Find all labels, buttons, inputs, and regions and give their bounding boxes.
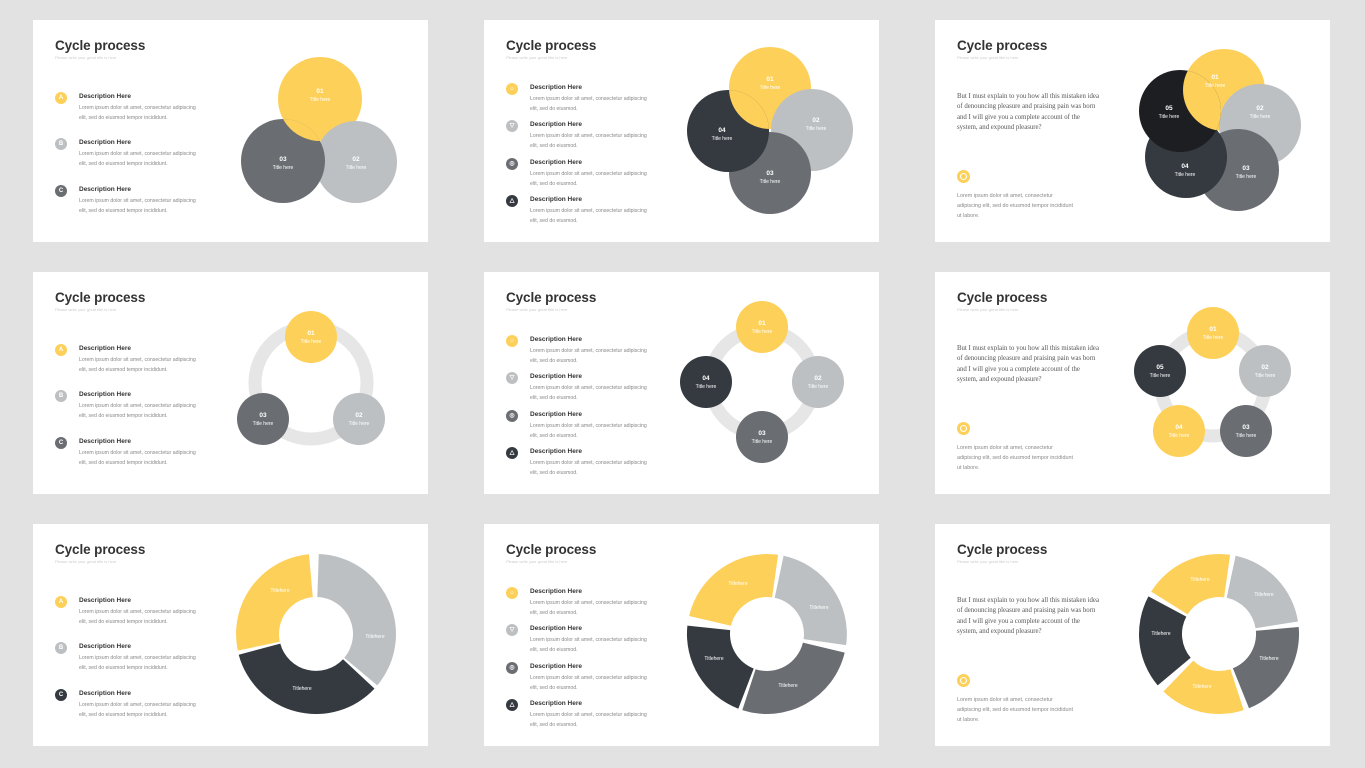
item 4 bbox=[506, 195, 647, 224]
item B: elit, sed do eiusmod tempor incididunt. bbox=[79, 665, 168, 671]
item 2: Description Here bbox=[530, 121, 582, 128]
item B: Lorem ipsum dolor sit amet, consectetur adipiscing bbox=[79, 151, 196, 157]
subtitle: Please write your great title is here bbox=[957, 559, 1018, 564]
item C: C bbox=[59, 440, 63, 446]
subtitle: Please write your great title is here bbox=[55, 307, 116, 312]
circle diagram: 04 bbox=[718, 127, 726, 134]
circle diagram: Title here bbox=[760, 85, 781, 91]
item 2: Lorem ipsum dolor sit amet, consectetur adipiscing bbox=[530, 133, 647, 139]
panel: three overlapping circles bbox=[33, 20, 428, 242]
item B: B bbox=[59, 393, 63, 399]
small text: ut labore. bbox=[957, 717, 979, 723]
circle diagram bbox=[687, 47, 853, 214]
item 2: Description Here bbox=[530, 625, 582, 632]
ring diagram: Title here bbox=[1255, 373, 1276, 379]
item C: elit, sed do eiusmod tempor incididunt. bbox=[79, 208, 168, 214]
paragraph bbox=[957, 345, 1099, 383]
item 1 bbox=[506, 587, 647, 616]
small text: adipiscing elit, sed do eiusmod tempor incididunt bbox=[957, 455, 1073, 461]
small text bbox=[957, 445, 1073, 471]
circle diagram: Title here bbox=[806, 126, 827, 132]
circle diagram: Title here bbox=[1205, 83, 1226, 89]
ring diagram bbox=[680, 301, 844, 463]
ring diagram bbox=[1134, 307, 1291, 457]
item A: elit, sed do eiusmod tempor incididunt. bbox=[79, 619, 168, 625]
item 2: Description Here bbox=[530, 373, 582, 380]
item 3: Description Here bbox=[530, 411, 582, 418]
ring diagram: 02 bbox=[1261, 364, 1269, 371]
item 4: Lorem ipsum dolor sit amet, consectetur adipiscing bbox=[530, 460, 647, 466]
item 2 bbox=[506, 624, 647, 653]
circle diagram: Title here bbox=[1159, 114, 1180, 120]
item B: B bbox=[59, 645, 63, 651]
ring diagram: Title here bbox=[1203, 335, 1224, 341]
ring diagram: Title here bbox=[808, 384, 829, 390]
item 4: △ bbox=[510, 198, 514, 204]
circle diagram: Title here bbox=[1236, 174, 1257, 180]
item 4: elit, sed do eiusmod. bbox=[530, 218, 578, 224]
ring diagram: 01 bbox=[758, 320, 766, 327]
donut diagram: Titlehere bbox=[1192, 684, 1212, 690]
ring diagram: 05 bbox=[1156, 364, 1164, 371]
ring diagram: 01 bbox=[307, 330, 315, 337]
item B bbox=[55, 642, 196, 671]
subtitle: Please write your great title is here bbox=[55, 559, 116, 564]
item 1: Lorem ipsum dolor sit amet, consectetur adipiscing bbox=[530, 96, 647, 102]
item 1 bbox=[506, 335, 647, 364]
ring diagram: 02 bbox=[814, 375, 822, 382]
item 2 bbox=[506, 120, 647, 149]
item 1: elit, sed do eiusmod. bbox=[530, 610, 578, 616]
circle diagram bbox=[1139, 49, 1301, 211]
small text: Lorem ipsum dolor sit amet, consectetur bbox=[957, 193, 1053, 199]
paragraph: and I will give you a complete account of the bbox=[957, 366, 1080, 373]
title: Cycle process bbox=[506, 290, 596, 305]
paragraph: But I must explain to you how all this mistaken idea bbox=[957, 597, 1099, 604]
item 1: ☼ bbox=[509, 338, 515, 344]
ring diagram: Title here bbox=[752, 439, 773, 445]
item B: Lorem ipsum dolor sit amet, consectetur adipiscing bbox=[79, 655, 196, 661]
small text: adipiscing elit, sed do eiusmod tempor incididunt bbox=[957, 707, 1073, 713]
item C: Lorem ipsum dolor sit amet, consectetur adipiscing bbox=[79, 198, 196, 204]
item 1: ☼ bbox=[509, 86, 515, 92]
paragraph: But I must explain to you how all this mistaken idea bbox=[957, 345, 1099, 352]
subtitle: Please write your great title is here bbox=[506, 307, 567, 312]
circle diagram: Title here bbox=[346, 165, 367, 171]
circle diagram: 02 bbox=[352, 156, 360, 163]
title: Cycle process bbox=[506, 542, 596, 557]
item C: Description Here bbox=[79, 186, 131, 193]
title: Cycle process bbox=[55, 542, 145, 557]
circle diagram: 02 bbox=[1256, 105, 1264, 112]
item 2: Lorem ipsum dolor sit amet, consectetur adipiscing bbox=[530, 385, 647, 391]
item A: Lorem ipsum dolor sit amet, consectetur adipiscing bbox=[79, 609, 196, 615]
ring diagram: 03 bbox=[758, 430, 766, 437]
item C: elit, sed do eiusmod tempor incididunt. bbox=[79, 460, 168, 466]
item C: C bbox=[59, 188, 63, 194]
item 3: elit, sed do eiusmod. bbox=[530, 685, 578, 691]
circle diagram: 02 bbox=[812, 117, 820, 124]
item 4: Description Here bbox=[530, 700, 582, 707]
paragraph: and I will give you a complete account of the bbox=[957, 618, 1080, 625]
item B: Description Here bbox=[79, 643, 131, 650]
item C bbox=[55, 185, 196, 214]
item B: Lorem ipsum dolor sit amet, consectetur adipiscing bbox=[79, 403, 196, 409]
subtitle: Please write your great title is here bbox=[506, 55, 567, 60]
ring diagram: 03 bbox=[259, 412, 267, 419]
item 4: Lorem ipsum dolor sit amet, consectetur adipiscing bbox=[530, 712, 647, 718]
item A: Description Here bbox=[79, 345, 131, 352]
circle diagram: Title here bbox=[712, 136, 733, 142]
paragraph: system, and expound pleasure? bbox=[957, 628, 1042, 635]
item 3 bbox=[506, 662, 647, 691]
ring diagram: 04 bbox=[702, 375, 710, 382]
circle diagram bbox=[241, 57, 397, 203]
item B: elit, sed do eiusmod tempor incididunt. bbox=[79, 161, 168, 167]
circle diagram: Title here bbox=[273, 165, 294, 171]
donut diagram: Titlehere bbox=[704, 656, 724, 662]
item 2 bbox=[506, 372, 647, 401]
item 2: ▽ bbox=[510, 627, 514, 633]
circle diagram: 01 bbox=[1211, 74, 1219, 81]
circle diagram: 05 bbox=[1165, 105, 1173, 112]
item 3: Description Here bbox=[530, 663, 582, 670]
ring diagram: 01 bbox=[1209, 326, 1217, 333]
item 2: elit, sed do eiusmod. bbox=[530, 395, 578, 401]
item C bbox=[55, 437, 196, 466]
ring diagram: 02 bbox=[355, 412, 363, 419]
panel: four overlapping circles bbox=[484, 20, 879, 242]
item 1: Description Here bbox=[530, 588, 582, 595]
item A bbox=[55, 596, 196, 625]
item C: Description Here bbox=[79, 690, 131, 697]
circle diagram: 03 bbox=[766, 170, 774, 177]
small text: Lorem ipsum dolor sit amet, consectetur bbox=[957, 697, 1053, 703]
circle diagram: 04 bbox=[1181, 163, 1189, 170]
paragraph: But I must explain to you how all this mistaken idea bbox=[957, 93, 1099, 100]
ring diagram: Title here bbox=[301, 339, 322, 345]
ring diagram: 04 bbox=[1175, 424, 1183, 431]
item A: Description Here bbox=[79, 597, 131, 604]
paragraph: of denouncing pleasure and praising pain was born bbox=[957, 103, 1095, 110]
donut diagram: Titlehere bbox=[1259, 656, 1279, 662]
panel: three-segment donut bbox=[33, 524, 428, 746]
item B: B bbox=[59, 141, 63, 147]
title: Cycle process bbox=[55, 290, 145, 305]
item A: A bbox=[59, 599, 63, 605]
item 4: elit, sed do eiusmod. bbox=[530, 470, 578, 476]
item 2: ▽ bbox=[510, 375, 514, 381]
item 3 bbox=[506, 158, 647, 187]
circle diagram: Title here bbox=[760, 179, 781, 185]
circle diagram: 01 bbox=[316, 88, 324, 95]
paragraph bbox=[957, 93, 1099, 131]
item A: A bbox=[59, 347, 63, 353]
item 3: ◎ bbox=[509, 161, 515, 167]
item C: C bbox=[59, 692, 63, 698]
panel: five-segment donut bbox=[935, 524, 1330, 746]
item 3 bbox=[506, 410, 647, 439]
panel: ring with five circles bbox=[935, 272, 1330, 494]
small text: ut labore. bbox=[957, 465, 979, 471]
item 3: Lorem ipsum dolor sit amet, consectetur adipiscing bbox=[530, 171, 647, 177]
item B bbox=[55, 138, 196, 167]
donut diagram: Titlehere bbox=[1190, 577, 1210, 583]
item A: elit, sed do eiusmod tempor incididunt. bbox=[79, 115, 168, 121]
circle diagram: 01 bbox=[766, 76, 774, 83]
title: Cycle process bbox=[957, 290, 1047, 305]
circle diagram: Title here bbox=[310, 97, 331, 103]
ring diagram: Title here bbox=[349, 421, 370, 427]
item 2: ▽ bbox=[510, 123, 514, 129]
item B bbox=[55, 390, 196, 419]
paragraph: of denouncing pleasure and praising pain was born bbox=[957, 607, 1095, 614]
donut diagram: Titlehere bbox=[365, 634, 385, 640]
donut diagram: Titlehere bbox=[292, 686, 312, 692]
item 4: △ bbox=[510, 450, 514, 456]
paragraph bbox=[957, 597, 1099, 635]
ring diagram: Title here bbox=[1236, 433, 1257, 439]
item A: Lorem ipsum dolor sit amet, consectetur adipiscing bbox=[79, 357, 196, 363]
donut diagram bbox=[686, 554, 847, 714]
item C: Lorem ipsum dolor sit amet, consectetur adipiscing bbox=[79, 450, 196, 456]
title: Cycle process bbox=[55, 38, 145, 53]
small text: Lorem ipsum dolor sit amet, consectetur bbox=[957, 445, 1053, 451]
item 2: Lorem ipsum dolor sit amet, consectetur adipiscing bbox=[530, 637, 647, 643]
panel: five overlapping circles bbox=[935, 20, 1330, 242]
item 4: elit, sed do eiusmod. bbox=[530, 722, 578, 728]
donut diagram: Titlehere bbox=[1254, 592, 1274, 598]
circle diagram: 03 bbox=[1242, 165, 1250, 172]
item B: elit, sed do eiusmod tempor incididunt. bbox=[79, 413, 168, 419]
item A: A bbox=[59, 95, 63, 101]
item 1: Lorem ipsum dolor sit amet, consectetur adipiscing bbox=[530, 600, 647, 606]
item 3: Description Here bbox=[530, 159, 582, 166]
item A bbox=[55, 344, 196, 373]
icon bbox=[957, 674, 970, 687]
ring diagram: Title here bbox=[253, 421, 274, 427]
item C: elit, sed do eiusmod tempor incididunt. bbox=[79, 712, 168, 718]
ring diagram: Title here bbox=[1150, 373, 1171, 379]
small text bbox=[957, 697, 1073, 723]
donut diagram bbox=[1139, 554, 1299, 714]
ring diagram: Title here bbox=[696, 384, 717, 390]
ring diagram: Title here bbox=[752, 329, 773, 335]
item 2: elit, sed do eiusmod. bbox=[530, 647, 578, 653]
item 3: Lorem ipsum dolor sit amet, consectetur adipiscing bbox=[530, 675, 647, 681]
small text: adipiscing elit, sed do eiusmod tempor incididunt bbox=[957, 203, 1073, 209]
item 4 bbox=[506, 699, 647, 728]
ring diagram: Title here bbox=[1169, 433, 1190, 439]
item 4 bbox=[506, 447, 647, 476]
item 4: △ bbox=[510, 702, 514, 708]
ring diagram bbox=[237, 311, 385, 446]
item 1: Lorem ipsum dolor sit amet, consectetur adipiscing bbox=[530, 348, 647, 354]
donut diagram: Titlehere bbox=[778, 683, 798, 689]
item 1 bbox=[506, 83, 647, 112]
subtitle: Please write your great title is here bbox=[55, 55, 116, 60]
donut diagram: Titlehere bbox=[809, 605, 829, 611]
title: Cycle process bbox=[506, 38, 596, 53]
donut diagram: Titlehere bbox=[270, 588, 290, 594]
item 1: ☼ bbox=[509, 590, 515, 596]
item 3: elit, sed do eiusmod. bbox=[530, 433, 578, 439]
subtitle: Please write your great title is here bbox=[957, 307, 1018, 312]
donut diagram: Titlehere bbox=[1151, 631, 1171, 637]
item 2: elit, sed do eiusmod. bbox=[530, 143, 578, 149]
item B: Description Here bbox=[79, 139, 131, 146]
item A bbox=[55, 92, 196, 121]
paragraph: of denouncing pleasure and praising pain was born bbox=[957, 355, 1095, 362]
small text bbox=[957, 193, 1073, 219]
item C bbox=[55, 689, 196, 718]
circle diagram: 03 bbox=[279, 156, 287, 163]
item A: elit, sed do eiusmod tempor incididunt. bbox=[79, 367, 168, 373]
ring diagram: 03 bbox=[1242, 424, 1250, 431]
donut diagram: Titlehere bbox=[728, 581, 748, 587]
paragraph: system, and expound pleasure? bbox=[957, 124, 1042, 131]
item 4: Description Here bbox=[530, 448, 582, 455]
item A: Lorem ipsum dolor sit amet, consectetur adipiscing bbox=[79, 105, 196, 111]
panel: ring with three circles bbox=[33, 272, 428, 494]
icon bbox=[957, 422, 970, 435]
paragraph: system, and expound pleasure? bbox=[957, 376, 1042, 383]
icon bbox=[957, 170, 970, 183]
circle diagram: Title here bbox=[1250, 114, 1271, 120]
item 4: Lorem ipsum dolor sit amet, consectetur adipiscing bbox=[530, 208, 647, 214]
item C: Lorem ipsum dolor sit amet, consectetur adipiscing bbox=[79, 702, 196, 708]
donut diagram bbox=[236, 554, 396, 714]
circle diagram: Title here bbox=[1175, 172, 1196, 178]
item 1: elit, sed do eiusmod. bbox=[530, 106, 578, 112]
small text: ut labore. bbox=[957, 213, 979, 219]
panel: four-segment donut bbox=[484, 524, 879, 746]
title: Cycle process bbox=[957, 542, 1047, 557]
item A: Description Here bbox=[79, 93, 131, 100]
item 3: elit, sed do eiusmod. bbox=[530, 181, 578, 187]
panel: ring with four circles bbox=[484, 272, 879, 494]
item C: Description Here bbox=[79, 438, 131, 445]
paragraph: and I will give you a complete account of the bbox=[957, 114, 1080, 121]
item 3: ◎ bbox=[509, 665, 515, 671]
item 4: Description Here bbox=[530, 196, 582, 203]
item 1: Description Here bbox=[530, 336, 582, 343]
item 1: elit, sed do eiusmod. bbox=[530, 358, 578, 364]
item 3: ◎ bbox=[509, 413, 515, 419]
subtitle: Please write your great title is here bbox=[957, 55, 1018, 60]
item B: Description Here bbox=[79, 391, 131, 398]
item 1: Description Here bbox=[530, 84, 582, 91]
item 3: Lorem ipsum dolor sit amet, consectetur adipiscing bbox=[530, 423, 647, 429]
title: Cycle process bbox=[957, 38, 1047, 53]
subtitle: Please write your great title is here bbox=[506, 559, 567, 564]
